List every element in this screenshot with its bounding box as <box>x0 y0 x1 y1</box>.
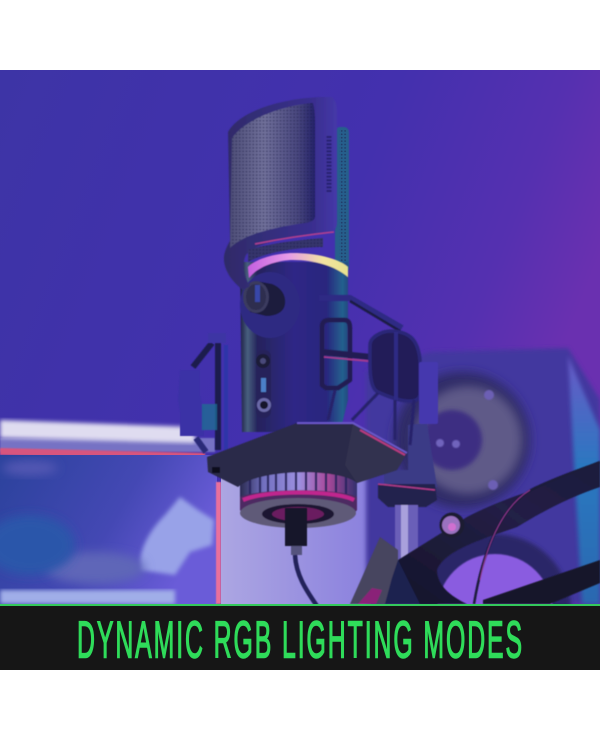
USB cable <box>285 508 317 606</box>
blurred studio speaker <box>364 346 600 604</box>
thumb screw <box>440 512 464 538</box>
photo: microphone on boom arm <box>0 70 600 604</box>
shock mount cage <box>178 298 438 452</box>
lavender wall behind mic <box>221 472 371 604</box>
caption band <box>0 604 600 670</box>
dark band <box>0 606 600 670</box>
upper arm <box>398 463 600 604</box>
blurred monitor on desk <box>0 420 221 604</box>
base plate and threaded ring <box>207 423 407 528</box>
right cage arms <box>319 298 402 328</box>
threaded ring <box>239 472 358 498</box>
thin cable along arm <box>474 462 600 604</box>
lower vent mesh <box>248 238 323 262</box>
control panel with headphone jack <box>256 350 271 418</box>
mesh screen <box>230 103 315 248</box>
support post behind base <box>378 423 437 565</box>
gain knob <box>243 281 285 316</box>
knob recess <box>240 272 283 338</box>
pop filter shield <box>224 97 337 290</box>
boom arm <box>350 462 600 604</box>
plate <box>206 423 362 488</box>
illegible embossed logo marks on shield <box>326 136 332 192</box>
green top rule <box>0 604 600 606</box>
LED light ring <box>248 253 348 278</box>
purple studio wall background <box>0 70 600 604</box>
bottom collar <box>240 490 357 512</box>
left cage arms <box>193 340 218 450</box>
microphone body <box>240 253 348 432</box>
lower arm <box>483 560 600 604</box>
clouds on monitor screen <box>0 461 214 604</box>
bracket clamp <box>350 537 398 604</box>
rear grille strip <box>335 127 349 272</box>
